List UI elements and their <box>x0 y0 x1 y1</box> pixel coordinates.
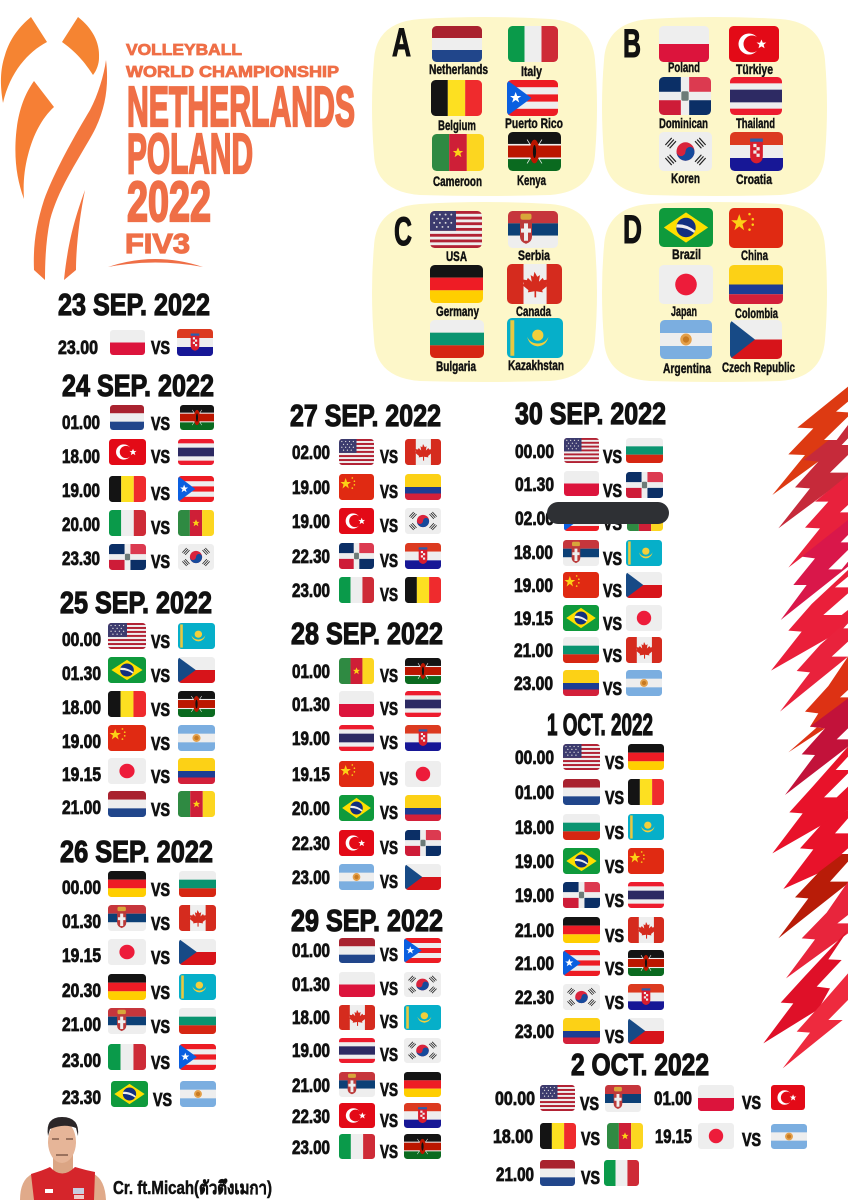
photo: player in red USA jersey <box>20 1117 106 1200</box>
match: Bulgaria vs Kazakhstan: VS <box>605 823 624 843</box>
match: Germany vs Canada <box>515 917 664 946</box>
match: Brazil vs Czech Republic: 01.30 <box>62 664 101 685</box>
credit line: Cr. ft.Micah(ตัวตึงเมกา) <box>113 1178 272 1198</box>
match: Serbia vs Canada <box>62 905 216 934</box>
match: Dominican vs Thailand <box>515 882 664 911</box>
heading: 28 Sep: 28 SEP. 2022 <box>291 616 443 651</box>
match: USA vs Kazakhstan: 00.00 <box>62 630 101 651</box>
match: Serbia vs Canada: VS <box>151 914 170 934</box>
match: Türkiye vs Thailand <box>62 439 214 468</box>
match: Japan vs Argentina <box>655 1123 807 1150</box>
panel: group B: Thailand <box>736 115 775 131</box>
logo: event title wordmark <box>108 42 355 267</box>
match: USA vs Kazakhstan <box>62 623 215 652</box>
match: Japan vs Argentina: 19.15 <box>655 1127 692 1148</box>
match: Colombia vs Czech Republic: 23.00 <box>515 1022 554 1043</box>
match: Puerto Rico vs Kenya: VS <box>605 959 624 979</box>
match: Türkiye vs Dominican: VS <box>380 838 398 858</box>
match: China vs Argentina: 19.00 <box>62 732 101 753</box>
match: Netherlands vs Cameroon <box>62 791 215 820</box>
match: China vs Argentina <box>62 725 215 754</box>
match: Poland vs Croatia <box>58 329 213 359</box>
match: Japan vs Colombia <box>62 758 215 787</box>
heading: 30 Sep: 30 SEP. 2022 <box>515 396 666 431</box>
panel: group A: Netherlands <box>429 61 488 77</box>
panel: group D: Brazil <box>672 246 701 262</box>
match: China vs Colombia <box>292 474 441 502</box>
match: Thailand vs Korea <box>292 1038 441 1065</box>
logo: event title wordmark: NETHERLANDS <box>127 75 355 139</box>
match: Türkiye vs Korea: VS <box>380 516 398 536</box>
match: Dominican vs Thailand: VS <box>605 891 624 911</box>
panel: group A: Kenya <box>517 172 546 188</box>
match: Serbia vs Germany: 21.00 <box>292 1076 330 1097</box>
match: Netherlands vs Italy: 21.00 <box>496 1165 534 1186</box>
match: Thailand vs Korea: VS <box>380 1045 398 1065</box>
panel: group A: Puerto Rico <box>505 115 563 131</box>
redaction bar <box>547 502 669 524</box>
match: Germany vs Canada: VS <box>605 926 624 946</box>
match: Italy vs Kenya <box>292 1134 441 1162</box>
match: Netherlands vs Belgium: VS <box>605 788 624 808</box>
match: Japan vs Argentina: VS <box>742 1130 761 1150</box>
match: Poland vs Korea: 01.30 <box>292 975 330 996</box>
panel: group D: D <box>623 208 642 252</box>
match: Argentina vs Czech Republic: VS <box>380 872 398 892</box>
panel: group A: Italy <box>521 63 542 79</box>
match: Türkiye vs Korea: 19.00 <box>292 512 330 533</box>
logo: volleyball figure emblem <box>1 17 107 280</box>
match: Brazil vs Colombia: VS <box>380 803 398 823</box>
match: Puerto Rico vs Cameroon (partly covered): VS <box>603 514 622 534</box>
match: USA vs Bulgaria: VS <box>603 447 622 467</box>
match: Poland vs Türkiye: VS <box>742 1093 761 1113</box>
match: China vs Japan: 19.15 <box>292 765 330 786</box>
match: Netherlands vs Puerto Rico: 01.00 <box>292 941 330 962</box>
match: USA vs Serbia: 00.00 <box>495 1089 535 1110</box>
match: Germany vs Kazakhstan <box>62 974 216 1003</box>
match: Türkiye vs Croatia <box>292 1103 441 1131</box>
match: USA vs Bulgaria: 00.00 <box>515 442 554 463</box>
match: Brazil vs Czech Republic: VS <box>151 666 170 686</box>
match: Italy vs Puerto Rico <box>62 1044 216 1073</box>
match: Korea vs Croatia <box>515 984 664 1013</box>
logo: event title wordmark: 2022 <box>127 170 211 234</box>
match: Türkiye vs Croatia: VS <box>380 1111 398 1131</box>
match: Serbia vs Kazakhstan: 18.00 <box>514 543 553 564</box>
match: Italy vs Puerto Rico: 23.00 <box>62 1051 101 1072</box>
match: Puerto Rico vs Cameroon (partly covered) <box>515 506 663 534</box>
match: Belgium vs Kenya: 18.00 <box>62 698 101 719</box>
heading: 2 Oct: 2 OCT. 2022 <box>571 1047 709 1082</box>
match: USA vs Serbia <box>495 1085 641 1114</box>
match: Japan vs Czech Republic <box>62 939 216 968</box>
heading: 23 Sep: 23 SEP. 2022 <box>58 287 210 322</box>
match: Brazil vs Argentina: 23.30 <box>62 1088 101 1109</box>
match: Netherlands vs Kenya: VS <box>151 414 170 434</box>
match: Serbia vs Bulgaria: VS <box>151 1017 170 1037</box>
panel: group B: Croatia <box>736 171 772 187</box>
match: Italy vs Cameroon <box>62 510 214 538</box>
panel: group B: Poland <box>668 59 700 75</box>
match: Colombia vs Czech Republic <box>515 1018 664 1047</box>
match: Japan vs Colombia: 19.15 <box>62 765 101 786</box>
match: Bulgaria vs Canada: VS <box>603 646 622 666</box>
match: Italy vs Belgium: VS <box>380 585 398 605</box>
match: Dominican vs Korea: VS <box>151 552 170 572</box>
match: Canada vs Kazakhstan: 18.00 <box>292 1008 330 1029</box>
match: Belgium vs Cameroon <box>493 1123 643 1149</box>
match: Germany vs Canada: 21.00 <box>515 921 554 942</box>
match: USA vs Canada: VS <box>380 447 398 467</box>
match: Germany vs Bulgaria: 00.00 <box>62 878 101 899</box>
match: Brazil vs China: VS <box>605 857 624 877</box>
match: Brazil vs Czech Republic <box>62 657 215 686</box>
match: Poland vs Croatia: 23.00 <box>58 338 98 359</box>
match: USA vs Canada <box>292 439 441 467</box>
heading: 27 Sep: 27 SEP. 2022 <box>290 398 441 433</box>
match: Germany vs Bulgaria: VS <box>151 880 170 900</box>
logo: event title wordmark: VOLLEYBALL <box>126 42 242 59</box>
match: Colombia vs Argentina <box>514 670 662 699</box>
heading: 1 Oct: 1 OCT. 2022 <box>547 707 653 742</box>
match: Poland vs Korea: VS <box>380 979 398 999</box>
match: USA vs Kazakhstan: VS <box>151 632 170 652</box>
match: Colombia vs Argentina: VS <box>603 679 622 699</box>
logo: event title wordmark: POLAND <box>127 122 253 186</box>
match: Poland vs Türkiye <box>654 1085 805 1113</box>
match: Bulgaria vs Kazakhstan <box>515 814 664 843</box>
match: Dominican vs Croatia: 22.30 <box>292 547 330 568</box>
match: Brazil vs Japan: VS <box>603 614 622 634</box>
match: Brazil vs China: 19.00 <box>515 852 554 873</box>
match: China vs Czech Republic <box>514 572 662 601</box>
logo: event title wordmark: WORLD CHAMPIONSHIP <box>126 64 339 81</box>
match: Dominican vs Korea <box>62 544 214 572</box>
match: Bulgaria vs Canada <box>514 637 662 666</box>
decoration: red lightning bolts <box>763 387 848 1068</box>
match: Dominican vs Thailand: 19.00 <box>515 886 554 907</box>
panel: group B: Dominican <box>659 115 708 131</box>
match: Netherlands vs Kenya: 01.00 <box>62 413 100 434</box>
match: USA vs Bulgaria <box>515 438 663 467</box>
match: Türkiye vs Dominican <box>292 830 441 858</box>
match: Thailand vs Croatia <box>292 725 441 753</box>
match: Argentina vs Czech Republic: 23.00 <box>292 868 330 889</box>
panel: group D: China <box>741 247 768 263</box>
match: Netherlands vs Belgium: 01.00 <box>515 783 554 804</box>
match: Korea vs Croatia: VS <box>605 993 624 1013</box>
match: Dominican vs Croatia <box>292 543 441 571</box>
match: Cameroon vs Kenya <box>292 658 441 686</box>
match: Türkiye vs Thailand: 18.00 <box>62 447 100 468</box>
match: Belgium vs Cameroon: 18.00 <box>493 1127 533 1148</box>
match: Germany vs Kazakhstan: VS <box>151 983 170 1003</box>
heading: 29 Sep: 29 SEP. 2022 <box>291 903 443 938</box>
match: Poland vs Dominican <box>515 471 663 501</box>
match: Netherlands vs Cameroon: 21.00 <box>62 798 101 819</box>
panel: group D: Argentina <box>663 360 711 376</box>
heading: 25 Sep: 25 SEP. 2022 <box>60 585 212 620</box>
panel: group B: B <box>623 22 641 66</box>
match: Türkiye vs Korea <box>292 508 441 536</box>
match: Türkiye vs Dominican: 22.30 <box>292 834 330 855</box>
match: Serbia vs Kazakhstan: VS <box>603 549 622 569</box>
match: Brazil vs Japan: 19.15 <box>514 609 553 630</box>
match: Brazil vs Argentina: VS <box>153 1090 172 1110</box>
match: Cameroon vs Kenya: 01.00 <box>292 662 330 683</box>
match: Belgium vs Puerto Rico: 19.00 <box>62 481 100 502</box>
match: Serbia vs Kazakhstan <box>514 540 662 569</box>
panel: group A: A <box>392 21 411 65</box>
match: Italy vs Kenya: 23.00 <box>292 1138 330 1159</box>
match: Netherlands vs Puerto Rico <box>292 938 441 965</box>
match: Germany vs Bulgaria <box>62 871 216 900</box>
match: China vs Japan: VS <box>380 769 398 789</box>
match: Canada vs Kazakhstan: VS <box>380 1012 398 1032</box>
match: Japan vs Czech Republic: 19.15 <box>62 946 101 967</box>
match: Poland vs Dominican: VS <box>603 481 622 501</box>
panel: group C: Canada <box>516 303 551 319</box>
match: Japan vs Czech Republic: VS <box>151 948 170 968</box>
panel: group D: Czech Republic <box>722 359 795 375</box>
match: China vs Colombia: VS <box>380 482 398 502</box>
match: Argentina vs Czech Republic <box>292 864 441 892</box>
match: Italy vs Puerto Rico: VS <box>151 1053 170 1073</box>
match: Türkiye vs Thailand: VS <box>151 447 170 467</box>
match: Poland vs Thailand: VS <box>380 699 398 719</box>
match: Brazil vs Argentina <box>62 1081 216 1110</box>
match: Italy vs Cameroon: VS <box>151 518 170 538</box>
match: Belgium vs Puerto Rico <box>62 476 214 504</box>
match: USA vs Canada: 02.00 <box>292 443 330 464</box>
match: Dominican vs Korea: 23.30 <box>62 549 100 570</box>
match: USA vs Germany <box>515 744 664 773</box>
match: USA vs Serbia: VS <box>580 1094 599 1114</box>
match: Serbia vs Bulgaria <box>62 1008 216 1037</box>
panel: group D: Japan <box>671 303 697 319</box>
match: Belgium vs Kenya <box>62 691 215 720</box>
match: Thailand vs Croatia: 19.00 <box>292 729 330 750</box>
match: China vs Argentina: VS <box>151 734 170 754</box>
panel: group C: Bulgaria <box>436 358 476 374</box>
match: Italy vs Kenya: VS <box>380 1142 398 1162</box>
match: Brazil vs Colombia <box>292 795 441 823</box>
match: Serbia vs Bulgaria: 21.00 <box>62 1015 101 1036</box>
heading: 24 Sep: 24 SEP. 2022 <box>62 368 214 403</box>
panel: group D <box>602 202 827 382</box>
match: Bulgaria vs Canada: 21.00 <box>514 641 553 662</box>
match: Brazil vs Colombia: 20.00 <box>292 799 330 820</box>
match: Puerto Rico vs Cameroon (partly covered): 02.00 <box>515 509 554 530</box>
match: Poland vs Dominican: 01.30 <box>515 475 554 496</box>
panel: group C <box>372 202 597 382</box>
panel: group B: Türkiye <box>736 61 773 77</box>
match: Netherlands vs Italy: VS <box>581 1168 600 1188</box>
match: China vs Colombia: 19.00 <box>292 478 330 499</box>
panel: group A <box>372 17 597 196</box>
panel: group B <box>602 17 827 196</box>
match: Belgium vs Kenya: VS <box>151 700 170 720</box>
panel: group C: Kazakhstan <box>508 357 564 373</box>
match: Serbia vs Germany <box>292 1072 441 1100</box>
match: Poland vs Croatia: VS <box>151 338 170 358</box>
match: Bulgaria vs Kazakhstan: 18.00 <box>515 818 554 839</box>
match: Italy vs Belgium: 23.00 <box>292 581 330 602</box>
panel: group B: Koren <box>671 170 700 186</box>
match: Belgium vs Cameroon: VS <box>581 1129 600 1149</box>
match: Thailand vs Croatia: VS <box>380 733 398 753</box>
match: Poland vs Thailand: 01.30 <box>292 695 330 716</box>
match: China vs Czech Republic: 19.00 <box>514 576 553 597</box>
match: Brazil vs Japan <box>514 605 662 634</box>
panel: group C: C <box>394 210 412 254</box>
match: Cameroon vs Kenya: VS <box>380 666 398 686</box>
match: Netherlands vs Cameroon: VS <box>151 800 170 820</box>
match: Korea vs Croatia: 22.30 <box>515 988 554 1009</box>
match: Poland vs Türkiye: 01.00 <box>654 1089 692 1110</box>
panel: group D: Colombia <box>735 305 778 321</box>
match: Italy vs Belgium <box>292 577 441 605</box>
panel: group A: Cameroon <box>433 173 482 189</box>
match: Puerto Rico vs Kenya: 21.00 <box>515 954 554 975</box>
panel: group C: Serbia <box>518 247 550 263</box>
match: Japan vs Colombia: VS <box>151 767 170 787</box>
match: China vs Japan <box>292 761 441 789</box>
match: Germany vs Kazakhstan: 20.30 <box>62 981 101 1002</box>
match: USA vs Germany: 00.00 <box>515 748 554 769</box>
match: Thailand vs Korea: 19.00 <box>292 1041 330 1062</box>
match: Brazil vs China <box>515 848 664 877</box>
panel: group C: Germany <box>436 303 479 319</box>
match: Türkiye vs Croatia: 22.30 <box>292 1107 330 1128</box>
match: Netherlands vs Puerto Rico: VS <box>380 945 398 965</box>
match: Serbia vs Canada: 01.30 <box>62 912 101 933</box>
match: USA vs Germany: VS <box>605 753 624 773</box>
match: Dominican vs Croatia: VS <box>380 551 398 571</box>
match: Colombia vs Argentina: 23.00 <box>514 674 553 695</box>
heading: 26 Sep: 26 SEP. 2022 <box>60 834 213 869</box>
match: Puerto Rico vs Kenya <box>515 950 664 979</box>
match: Netherlands vs Kenya <box>62 405 214 434</box>
match: Serbia vs Germany: VS <box>380 1080 398 1100</box>
panel: group C: USA <box>446 248 467 264</box>
match: Poland vs Thailand <box>292 691 441 719</box>
logo: event title wordmark: FIV3 <box>125 228 190 259</box>
match: Netherlands vs Belgium <box>515 779 664 808</box>
match: Netherlands vs Italy <box>496 1160 639 1188</box>
match: Poland vs Korea <box>292 972 441 999</box>
match: Italy vs Cameroon: 20.00 <box>62 515 100 536</box>
match: Belgium vs Puerto Rico: VS <box>151 484 170 504</box>
panel: group A: Belgium <box>438 117 476 133</box>
match: Colombia vs Czech Republic: VS <box>605 1027 624 1047</box>
match: Canada vs Kazakhstan <box>292 1005 441 1032</box>
match: China vs Czech Republic: VS <box>603 581 622 601</box>
